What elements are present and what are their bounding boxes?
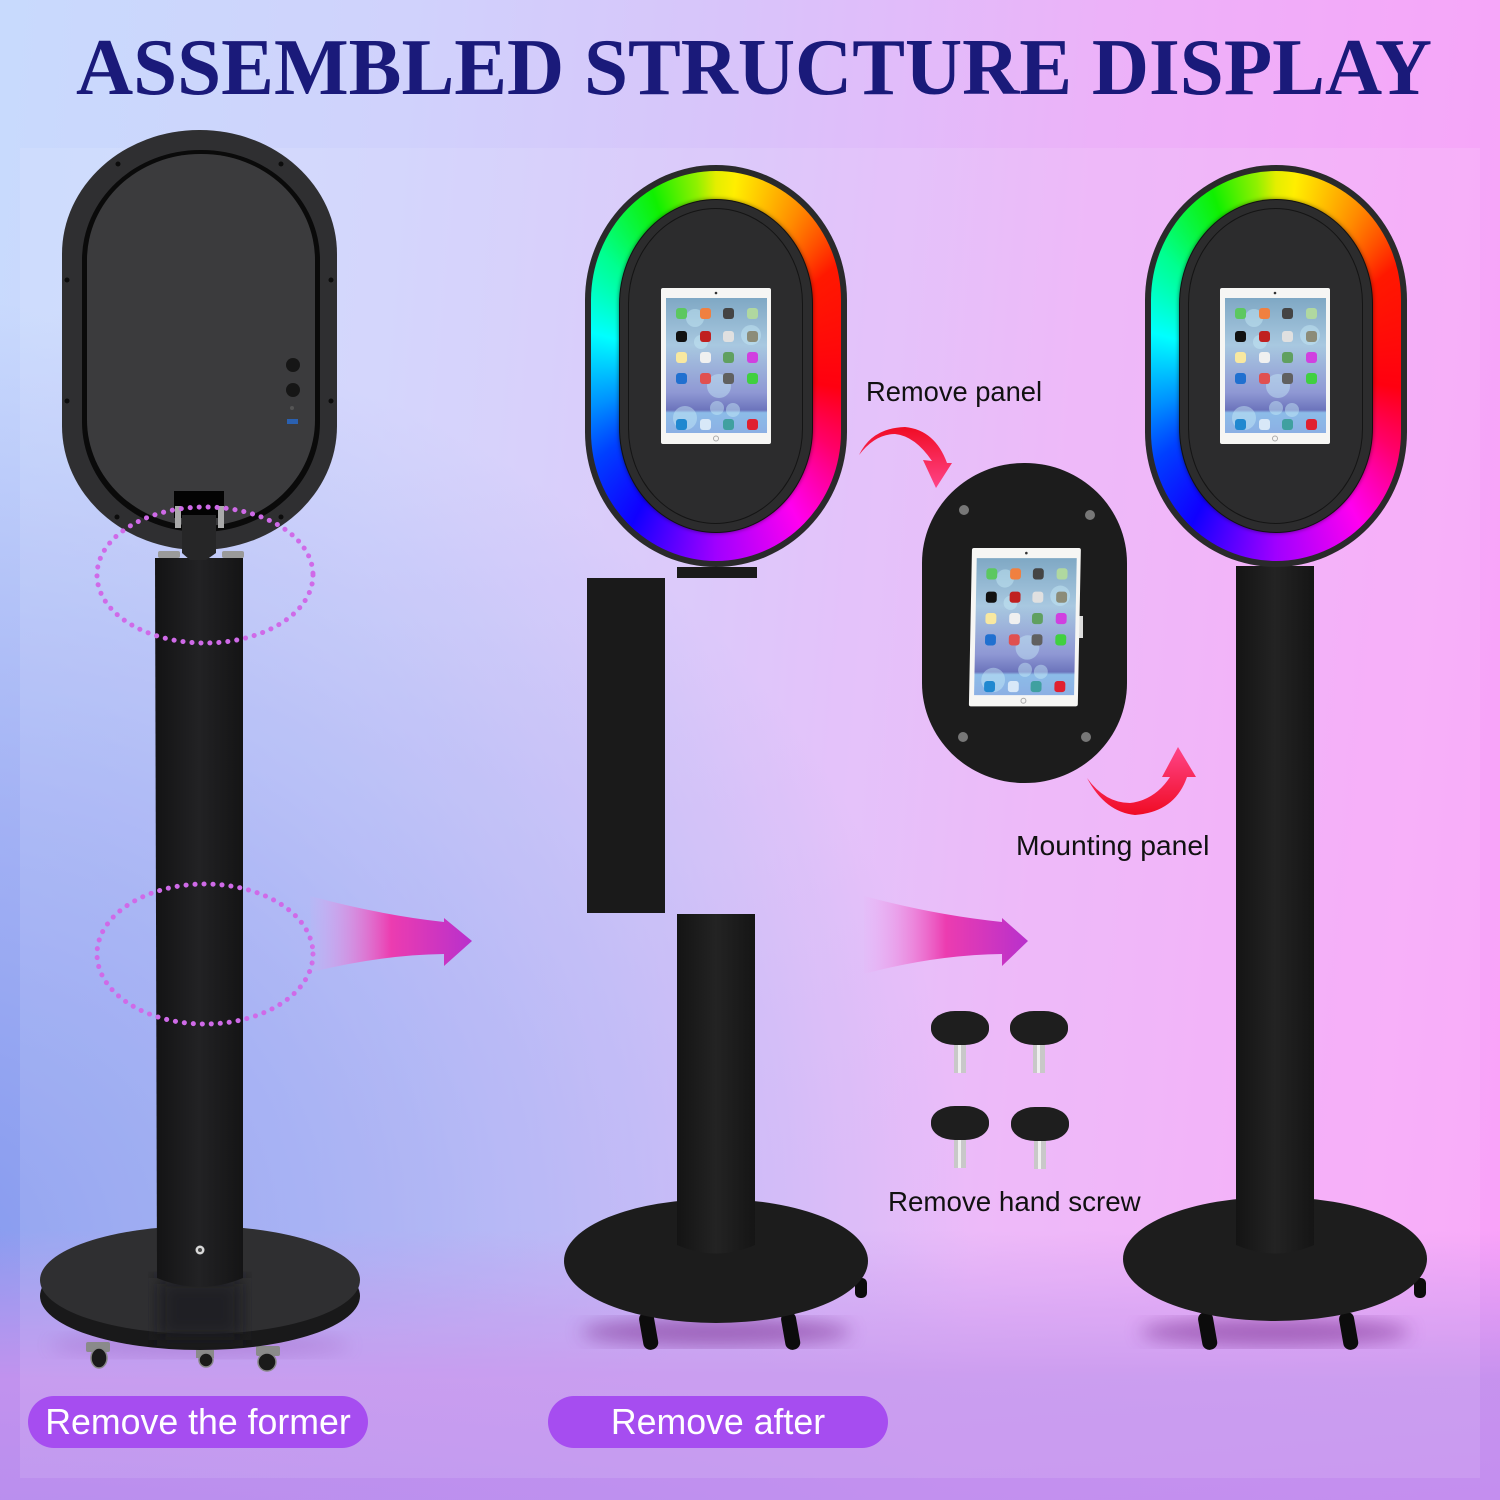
pill: remove the former: Remove the former: [45, 1402, 351, 1442]
tablet: right: [1220, 288, 1330, 444]
screw 4: [1011, 1107, 1069, 1169]
bolts on column top: [158, 551, 244, 558]
arrow 1: [310, 896, 472, 972]
arrow 2: [864, 896, 1028, 974]
base: [1123, 1197, 1427, 1321]
column over base: [677, 1180, 755, 1254]
tablet: middle: [661, 288, 771, 444]
label: mounting panel: Mounting panel: [1016, 830, 1209, 861]
floor shadow: [581, 1318, 851, 1346]
stand: assembled rear view: [40, 130, 360, 1372]
pill: remove after: Remove after: [611, 1402, 825, 1442]
round base: [40, 1226, 360, 1350]
oval back housing: [62, 130, 337, 550]
removed mounting panel with tablet: [922, 463, 1127, 783]
caster wheels: [638, 1278, 867, 1351]
floor shadow: [1140, 1318, 1410, 1346]
mount bracket: [677, 567, 757, 578]
screw 3: [931, 1106, 989, 1168]
RGB ring head: middle: [585, 165, 847, 567]
stand: disassembled lower column and base: [564, 578, 868, 1350]
hinge bracket: [174, 491, 224, 560]
RGB ring head: right: [1145, 165, 1407, 567]
column: [155, 558, 243, 1287]
dotted highlight middle: [97, 884, 313, 1024]
label: remove panel: Remove panel: [866, 376, 1042, 407]
base: [564, 1199, 868, 1323]
pill: remove after: [548, 1396, 888, 1448]
screw 2: [1010, 1011, 1068, 1073]
caster wheels: [86, 1342, 280, 1371]
column: [1236, 566, 1314, 1254]
red arrow: mounting panel: [1087, 747, 1196, 815]
caster wheels: [1197, 1278, 1426, 1351]
pink arrows and remove panel arrow: [316, 427, 1028, 970]
dotted highlight top: [97, 507, 313, 643]
hand screws: [931, 1011, 1069, 1169]
floor shadow: [50, 1333, 350, 1357]
title: ASSEMBLED STRUCTURE DISPLAY: [76, 22, 1432, 112]
lower column section: [677, 914, 755, 1254]
screw 1: [931, 1011, 989, 1073]
red arrow: remove panel: [859, 427, 952, 488]
stand: assembled front: [1123, 566, 1427, 1350]
label: remove hand screw: Remove hand screw: [888, 1186, 1141, 1217]
column key lock: [196, 1246, 204, 1254]
base shading under column: [157, 1278, 243, 1340]
upper column section: [587, 578, 665, 913]
pill: remove the former: [28, 1396, 368, 1448]
